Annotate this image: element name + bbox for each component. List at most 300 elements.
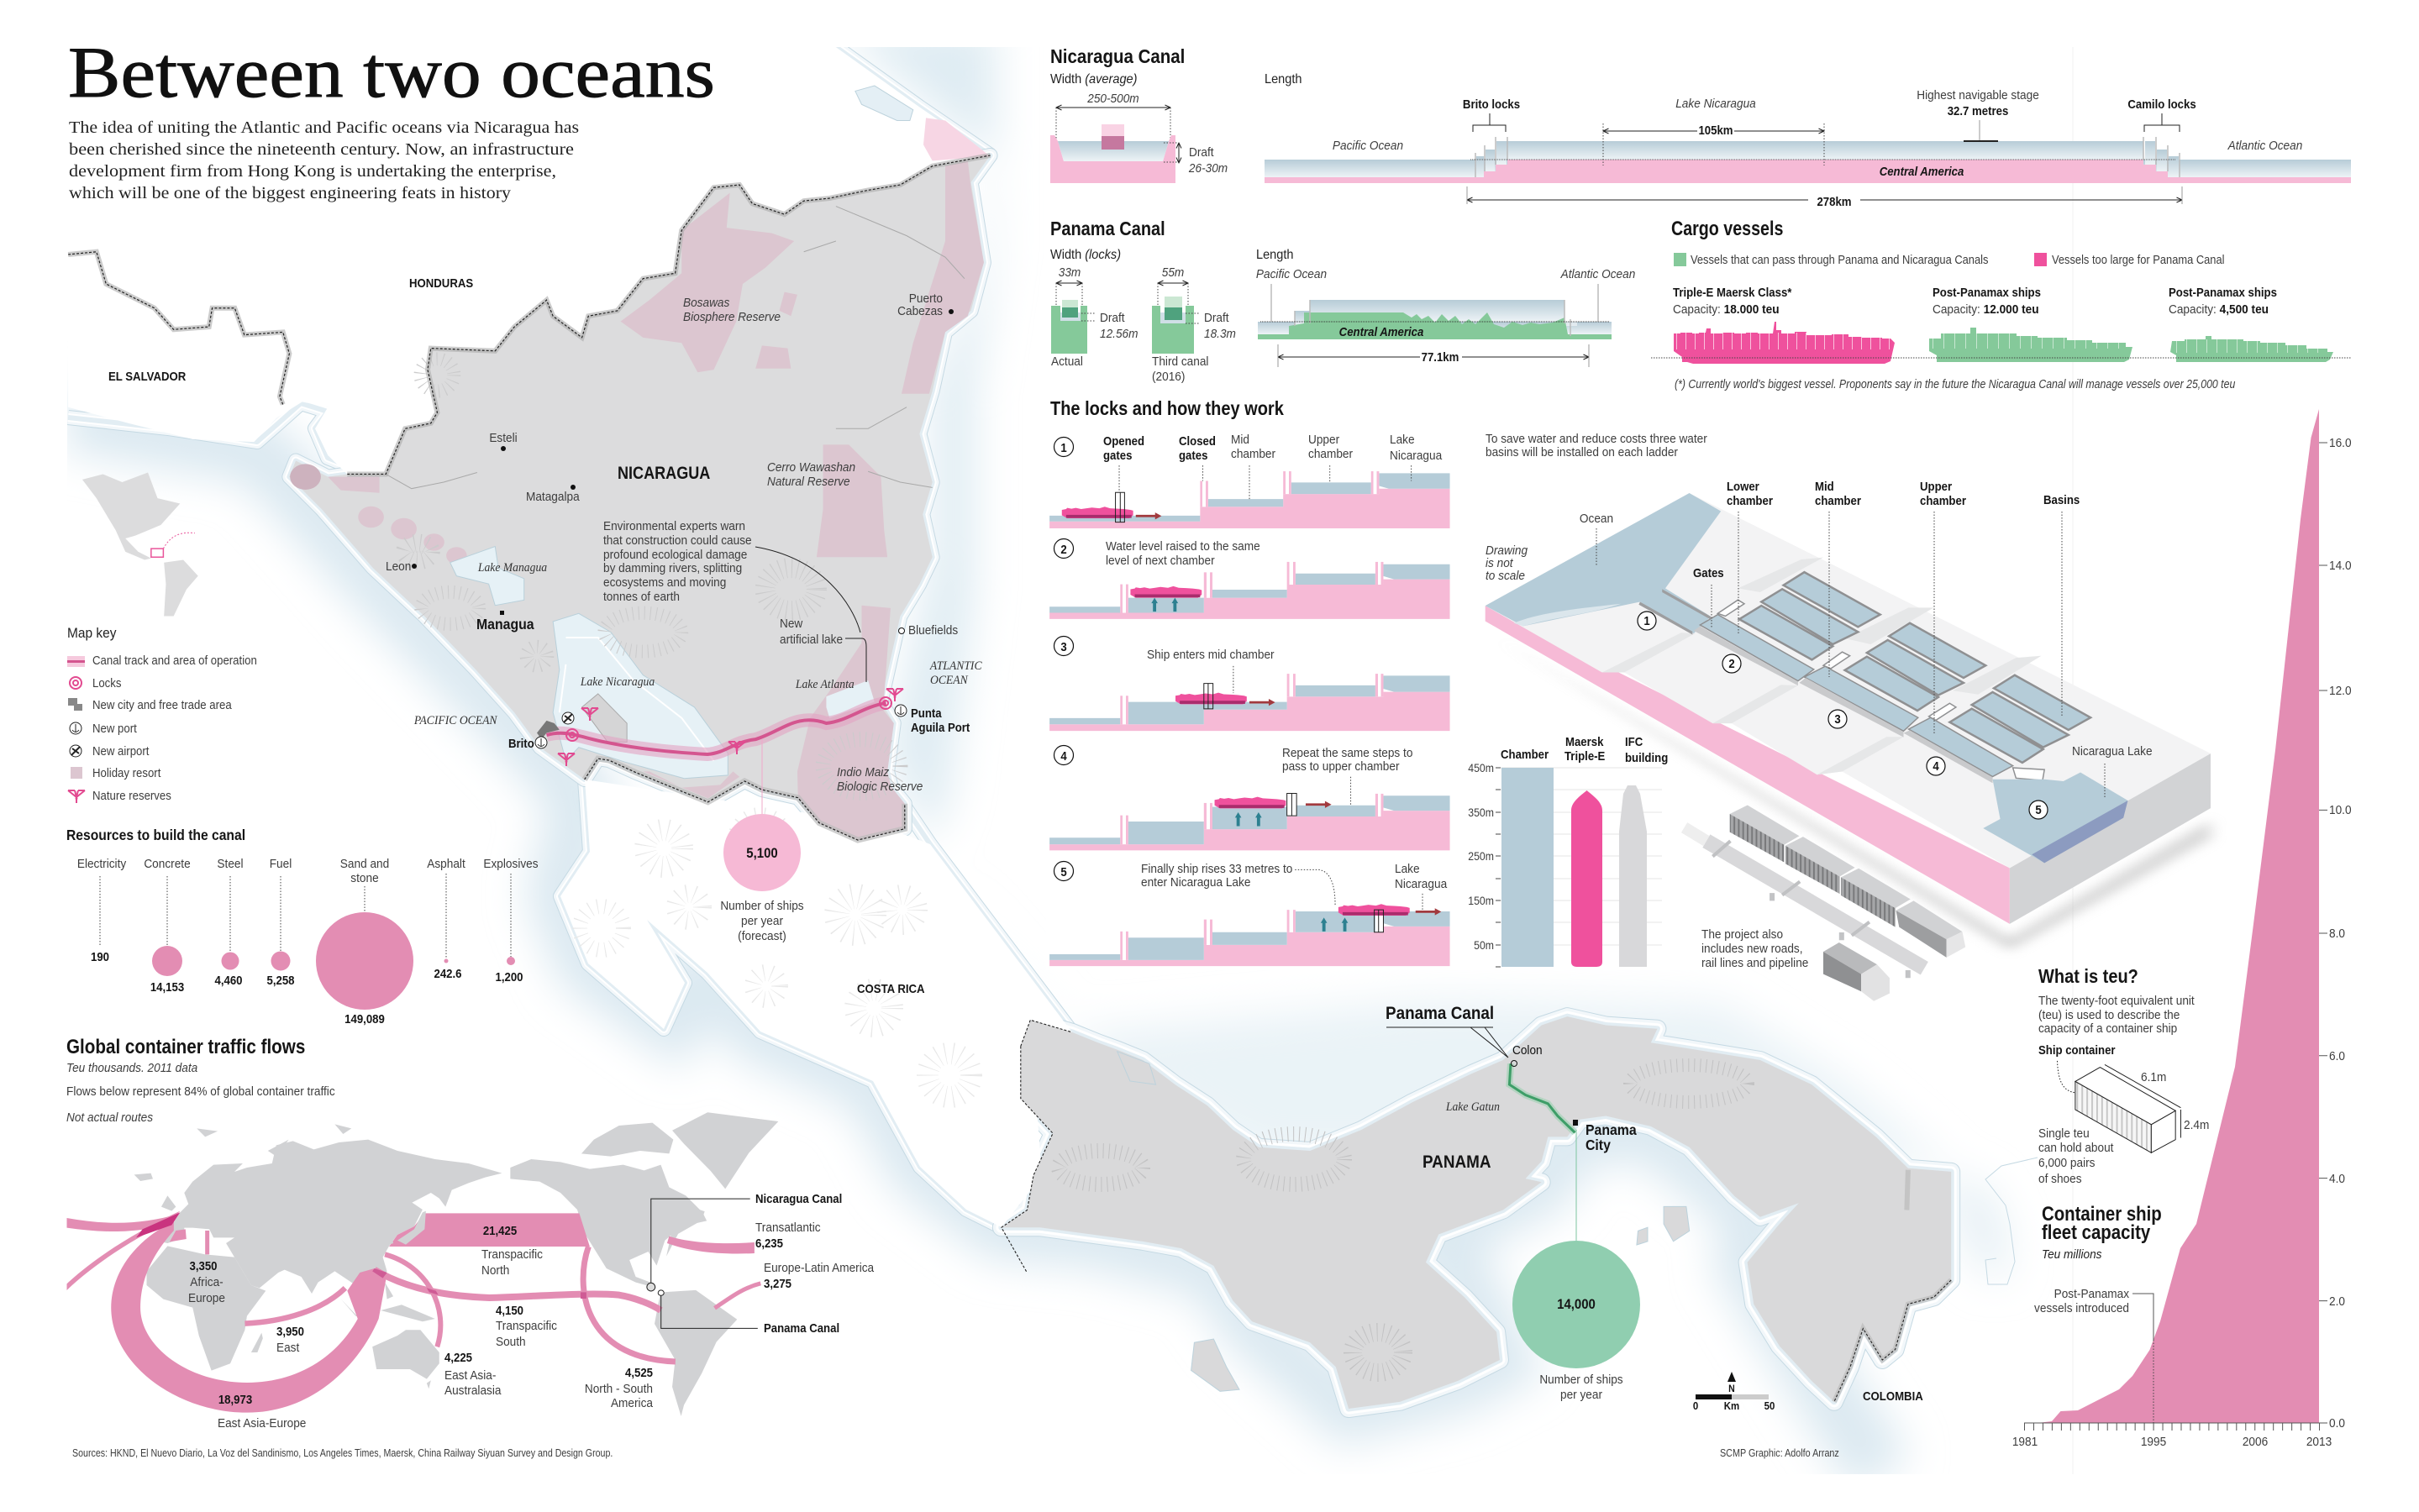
panel: resources to build the canal: Electricity: [77, 857, 127, 871]
map labels: Nicaragua: [108, 276, 982, 995]
panel: locks and how they work: [1049, 397, 1450, 966]
flow: North-South America: [583, 1247, 676, 1362]
isometric canal diagram: [1486, 493, 2211, 1001]
iso diagram labels: Ocean: [1580, 512, 1613, 526]
axis labels: 6.0: [2329, 1049, 2345, 1063]
chart: scale comparison: 150m: [1468, 894, 1494, 907]
length profile: 105km: [1698, 123, 1733, 137]
map key: New port: [92, 721, 137, 735]
callout: environmental warning: Environmental experts warn: [603, 519, 745, 533]
chart: scale comparison: Chamber: [1501, 747, 1549, 761]
lock icons on route: [566, 697, 891, 741]
length profile: Lake Nicaragua: [1675, 97, 1756, 111]
panel: what is teu: of shoes: [2038, 1172, 2082, 1186]
panel: what is teu: Ship container: [2038, 1042, 2116, 1057]
callout: environmental warning: profound ecological damage: [603, 548, 747, 562]
panel: resources to build the canal: Fuel: [270, 857, 292, 871]
panel: cargo vessels: Capacity: 4,500 teu: [2169, 302, 2269, 317]
lock labels: level of next chamber: [1106, 554, 1215, 568]
Nicaragua layers: [68, 118, 991, 840]
locks width: 12.56m: [1100, 327, 1139, 341]
iso diagram labels: The project also: [1701, 927, 1783, 942]
step 4: [1049, 793, 1450, 850]
step 2: [1049, 562, 1450, 619]
Panama map labels: City: [1585, 1137, 1611, 1153]
chart: fleet capacity: fleet capacity: [2042, 1221, 2151, 1243]
locks width: Draft: [1100, 311, 1125, 325]
world map labels: Transpacific: [481, 1247, 543, 1262]
title: Between two oceans: [68, 32, 715, 113]
lock labels: Upper: [1308, 433, 1339, 447]
chart: fleet capacity: [2012, 409, 2352, 1449]
map key: Locks: [92, 675, 122, 690]
map labels: Nicaragua: COSTA RICA: [857, 981, 925, 995]
panel: global container traffic flows heading: Flows below represent 84% of global container traffic: [66, 1084, 335, 1099]
flow: Africa-Europe: [67, 1211, 180, 1290]
map labels: Nicaragua: New: [780, 617, 803, 631]
chart: scale comparison: Triple-E: [1564, 748, 1605, 763]
panel: resources to build the canal: 149,089: [344, 1011, 385, 1026]
locks width: 18.3m: [1204, 327, 1236, 341]
world map labels: 4,150: [496, 1303, 523, 1317]
Panama map labels: Colon: [1512, 1043, 1543, 1058]
panel: global container traffic flows heading: Global container traffic flows: [66, 1036, 305, 1058]
panel: Nicaragua Canal: Length: [1265, 71, 1302, 87]
locks width: Draft: [1204, 311, 1229, 325]
Lake Nicaragua: [553, 613, 728, 779]
panel: Panama Canal: Width (locks): [1050, 247, 1121, 262]
iso diagram labels: chamber: [1815, 493, 1861, 507]
map labels: Nicaragua: Cerro Wawashan: [767, 460, 855, 475]
panel: resources to build the canal: 5,258: [267, 973, 295, 987]
map key: [67, 625, 257, 803]
world map labels: Panama Canal: [764, 1320, 839, 1335]
ocean: [1486, 493, 1721, 633]
lock labels: Mid: [1231, 433, 1249, 447]
panel: what is teu: 6,000 pairs: [2038, 1156, 2095, 1170]
map key: New airport: [92, 743, 150, 758]
panel: what is teu: (teu) is used to describe the: [2038, 1008, 2180, 1022]
chart: scale comparison: 350m: [1468, 806, 1494, 819]
length profile: Central America: [1339, 324, 1423, 339]
Panama canal route: [1509, 1063, 1575, 1132]
panel: locks and how they work: 4: [1060, 748, 1067, 763]
panel: cargo vessels: Cargo vessels: [1671, 217, 1783, 239]
panel: Panama Canal: Length: [1256, 247, 1293, 262]
map labels: Nicaragua: PACIFIC OCEAN: [413, 713, 498, 727]
lock labels: chamber: [1308, 447, 1353, 461]
world map labels: Europe-Latin America: [764, 1261, 874, 1275]
map labels: Nicaragua: Lake Nicaragua: [580, 675, 655, 689]
intro text: [69, 118, 579, 202]
canal area band: [547, 703, 886, 754]
map labels: Nicaragua: Brito: [508, 736, 534, 750]
chart: scale comparison: 450m: [1468, 761, 1494, 774]
world map labels: East: [276, 1341, 299, 1355]
Panama map labels: SCMP Graphic: Adolfo Arranz: [1720, 1446, 1839, 1459]
length profile: Brito locks: [1463, 97, 1520, 111]
chamber side walls: [1694, 626, 1993, 783]
panel: cargo vessels: Post-Panamax ships: [2169, 285, 2277, 299]
locks width: 55m: [1162, 265, 1184, 280]
chart: scale comparison: IFC: [1625, 734, 1643, 748]
flow overlap: [136, 1212, 180, 1237]
Japan and Korea: [381, 1211, 426, 1246]
map labels: Nicaragua: Lake Managua: [477, 560, 547, 575]
locks width: [1051, 265, 1236, 384]
panel: what is teu: The twenty-foot equivalent unit: [2038, 994, 2195, 1008]
map labels: Nicaragua: Managua: [476, 616, 534, 633]
panel: cargo vessels: Triple-E Maersk Class*: [1673, 285, 1792, 299]
iso diagram labels: to scale: [1486, 569, 1525, 583]
axis labels: 2013: [2306, 1435, 2332, 1449]
map labels: Nicaragua: ATLANTIC: [929, 659, 982, 673]
iso diagram labels: is not: [1486, 556, 1514, 570]
nature reserve icons: [558, 689, 903, 766]
world map labels: Nicaragua Canal: [755, 1191, 842, 1205]
length profile: [1265, 88, 2351, 208]
map labels: Nicaragua: Matagalpa: [526, 490, 580, 504]
intro text: been cherished since the nineteenth century. Now, an infrastructure: [69, 140, 574, 159]
axis labels: 2.0: [2329, 1294, 2345, 1309]
panel: what is teu: [2038, 965, 2209, 1186]
continents east: [655, 1112, 778, 1416]
chart: scale comparison: 250m: [1468, 849, 1494, 863]
length profile: 278km: [1817, 194, 1852, 208]
border dashed: [68, 155, 991, 840]
iso diagram labels: chamber: [1920, 493, 1966, 507]
width cross-section: 26-30m: [1188, 161, 1228, 176]
panel: locks and how they work: 5: [1060, 864, 1067, 879]
panel: resources to build the canal: Steel: [217, 857, 244, 871]
terrace bands: [1602, 558, 2041, 774]
iso diagram labels: 1: [1643, 613, 1650, 627]
reserve: India Maiz: [797, 606, 905, 840]
width cross-section: 250-500m: [1086, 92, 1139, 106]
Panama map labels: PANAMA: [1422, 1152, 1491, 1172]
iso diagram labels: rail lines and pipeline: [1701, 956, 1808, 970]
world map labels: Transatlantic: [755, 1221, 821, 1235]
gulf of Uraba: [1985, 1158, 2038, 1284]
Lake Atlanta: [826, 680, 875, 718]
panel: cargo vessels: Post-Panamax ships: [1933, 285, 2041, 299]
panel: cargo vessels: (*) Currently world's biggest vessel. Proponents say in the future the Nicaragua Canal will manage vessels over 25,000 teu: [1675, 377, 2236, 391]
map labels: Nicaragua: HONDURAS: [409, 276, 473, 290]
reserve tip Honduras: [923, 118, 991, 160]
iso diagram labels: includes new roads,: [1701, 942, 1803, 956]
intro text: which will be one of the biggest engineering feats in history: [69, 184, 511, 202]
iso diagram labels: Lower: [1727, 479, 1759, 493]
sea tint: [68, 25, 2008, 1474]
rivers: [386, 207, 965, 489]
step numbers: [1054, 437, 1074, 880]
world map labels: 6,235: [755, 1236, 783, 1250]
locks width: Actual: [1051, 354, 1083, 369]
airport icon: [562, 712, 574, 724]
world map labels: 3,350: [190, 1258, 218, 1273]
Panama map labels: Panama: [1585, 1121, 1637, 1138]
chart: fleet capacity: Teu millions: [2042, 1247, 2102, 1262]
map key: Map key: [67, 625, 117, 641]
scale bar: N: [1728, 1383, 1735, 1394]
reserve: Cerro Wawashan: [817, 444, 887, 557]
length profile: Atlantic Ocean: [1560, 267, 1635, 281]
map labels: Nicaragua: Biosphere Reserve: [683, 310, 781, 324]
map labels: Nicaragua: Bosawas: [683, 296, 729, 310]
chambers: [1700, 615, 2013, 777]
lock labels: Repeat the same steps to: [1282, 746, 1412, 760]
axis labels: 16.0: [2329, 436, 2352, 450]
Lake Managua: [450, 547, 524, 606]
axis labels: 1981: [2012, 1435, 2038, 1449]
iso labels: basins will be installed on each ladder: [1486, 445, 1678, 459]
length profile: Central America: [1880, 164, 1964, 178]
panel: Nicaragua Canal: Width (average): [1050, 71, 1137, 87]
map labels: Nicaragua: Aguila Port: [911, 720, 970, 734]
map key: Holiday resort: [92, 765, 161, 780]
lock labels: Water level raised to the same: [1106, 539, 1260, 554]
length profile: Atlantic Ocean: [2227, 139, 2302, 153]
lock labels: Nicaragua: [1395, 877, 1447, 891]
chart: fleet capacity: Post-Panamax: [2054, 1287, 2130, 1301]
hachure relief: [405, 359, 900, 793]
hachures: Costa Rica relief: [580, 818, 971, 1097]
callout: Nicaragua ships per year: Number of ships: [720, 899, 804, 913]
world map labels: North - South: [585, 1382, 653, 1396]
iso diagram labels: 4: [1933, 759, 1939, 773]
callout: environmental warning: by damming rivers, splitting: [603, 561, 742, 575]
panel: what is teu: What is teu?: [2038, 965, 2138, 987]
locks width: (2016): [1152, 370, 1185, 384]
reserve: west patches: [328, 477, 739, 798]
new city area: [537, 721, 560, 739]
callout: environmental warning: tonnes of earth: [603, 590, 680, 604]
world map labels: 3,950: [276, 1324, 304, 1338]
north america: [82, 473, 180, 560]
canal pointers: [647, 1199, 758, 1328]
iso labels: To save water and reduce costs three water: [1486, 432, 1707, 446]
panel: Panama Canal: Panama Canal: [1050, 218, 1165, 239]
reserve: Bosawas: [621, 193, 794, 372]
length profile: Pacific Ocean: [1256, 267, 1327, 281]
map labels: Nicaragua: Cabezas: [897, 304, 943, 318]
panel: cargo vessels: [1651, 217, 2351, 391]
flow: transpacific south: [375, 1270, 660, 1310]
top face: [1486, 493, 2211, 868]
map labels: Nicaragua: artificial lake: [780, 633, 843, 647]
truck: [1823, 942, 1877, 974]
lock labels: pass to upper chamber: [1282, 759, 1400, 774]
world map labels: East Asia-: [444, 1368, 497, 1383]
map labels: Nicaragua: Indio Maiz: [837, 765, 889, 780]
panel: cargo vessels: Capacity: 12.000 teu: [1933, 302, 2039, 317]
port icons: [535, 705, 907, 748]
world map with flows: [67, 1112, 778, 1416]
map key: New city and free trade area: [92, 697, 232, 711]
iso diagram labels: Gates: [1693, 565, 1724, 580]
lock diagrams: [1049, 465, 1450, 966]
callout: Panama ships per year: 14,000: [1557, 1297, 1596, 1312]
south america: [164, 560, 198, 616]
axis labels: 0.0: [2329, 1416, 2345, 1431]
axis labels: 8.0: [2329, 927, 2345, 941]
panel: cargo vessels: Capacity: 18.000 teu: [1673, 302, 1780, 317]
map labels: Nicaragua: Lake Atlanta: [795, 677, 855, 691]
iso diagram labels: chamber: [1727, 493, 1773, 507]
Panama map labels: Lake Gatun: [1445, 1100, 1500, 1114]
bar: Maersk Triple-E: [1571, 790, 1602, 967]
callout: Panama ships per year: Number of ships: [1539, 1373, 1623, 1387]
panel: Nicaragua Canal: [1050, 45, 2351, 208]
panel: cargo vessels: Vessels that can pass through Panama and Nicaragua Canals: [1691, 252, 1988, 266]
train tops: [1730, 805, 1962, 939]
reserve patches: [755, 292, 797, 369]
map key: Nature reserves: [92, 788, 171, 802]
lock labels: Opened: [1103, 433, 1144, 448]
lock labels: Closed: [1179, 433, 1216, 448]
map right edge: [2072, 47, 2074, 1474]
panel: resources to build the canal: 4,460: [215, 973, 243, 987]
axis labels: 4.0: [2329, 1172, 2345, 1186]
panel: what is teu: Single teu: [2038, 1126, 2090, 1141]
panel: global container traffic flows heading: Not actual routes: [66, 1110, 153, 1125]
Panama map labels: [1386, 1004, 1923, 1459]
Panama gulf islands: [1117, 1052, 1690, 1391]
panel: resources to build the canal: Concrete: [144, 857, 191, 871]
world map labels: 3,275: [764, 1276, 791, 1290]
world map labels: [188, 1191, 874, 1431]
iso labels: [1486, 432, 1707, 459]
locator box: [151, 549, 163, 557]
border Honduras shadow: [68, 155, 991, 474]
world map labels: 18,973: [218, 1392, 252, 1406]
flow: Europe-Latin America: [715, 1284, 760, 1308]
volcano: [290, 464, 321, 490]
world map labels: North: [481, 1263, 509, 1278]
left face: [1486, 606, 2010, 924]
width cross-section: Draft: [1189, 145, 1214, 160]
lock labels: gates: [1103, 448, 1133, 462]
world map labels: East Asia-Europe: [218, 1416, 306, 1431]
iso diagram labels: 2: [1728, 656, 1735, 670]
ship: Triple-E: [1674, 322, 1895, 364]
lock labels: gates: [1179, 448, 1208, 462]
land: Panama: [1002, 1016, 1951, 1409]
length profile: 32.7 metres: [1948, 103, 2008, 118]
iso diagram labels: 5: [2035, 802, 2042, 816]
length profile: Highest navigable stage: [1917, 88, 2039, 102]
iso diagram labels: Mid: [1815, 479, 1834, 493]
flow: Mediterranean: [170, 1229, 209, 1254]
bar: IFC building: [1619, 785, 1647, 967]
map labels: Nicaragua: OCEAN: [930, 673, 969, 687]
coast contour lines: [68, 47, 1951, 1409]
chart: fleet capacity: vessels introduced: [2034, 1301, 2129, 1315]
iso diagram labels: Basins: [2043, 492, 2080, 507]
Panama border dashed: [1002, 1020, 1951, 1402]
Panama map labels: Panama Canal: [1386, 1004, 1494, 1023]
panel: resources to build the canal: 242.6: [434, 966, 462, 980]
panel: resources to build the canal: stone: [350, 871, 379, 885]
map: central america background: [68, 25, 2038, 1474]
panel: resources to build the canal: Sand and: [340, 857, 389, 871]
flow: East Asia-Europe: [111, 1221, 387, 1413]
flow: Atlantic left: [67, 1214, 178, 1231]
length profile: Camilo locks: [2127, 97, 2196, 111]
length profile: 77.1km: [1422, 349, 1459, 364]
lock labels: Ship enters mid chamber: [1147, 648, 1275, 662]
callout: environmental warning: that construction could cause: [603, 533, 752, 548]
map labels: Nicaragua: Leon: [386, 559, 411, 574]
step 5: [1049, 904, 1450, 966]
flow: transatlantic: [667, 1236, 755, 1253]
panel: resources to build the canal: Asphalt: [427, 857, 465, 871]
scale bar: 50: [1764, 1399, 1775, 1412]
basins group 1: [1739, 572, 1880, 659]
intro text: development firm from Hong Kong is undertaking the enterprise,: [69, 162, 556, 181]
flow: East Asia-Australasia: [385, 1254, 440, 1347]
locks width: 33m: [1059, 265, 1081, 280]
chart: scale comparison: building: [1625, 750, 1668, 764]
chart: fleet capacity: Container ship: [2042, 1202, 2162, 1225]
axis labels: 1995: [2141, 1435, 2166, 1449]
map labels: Nicaragua: Biologic Reserve: [837, 780, 923, 794]
map labels: Nicaragua: Bluefields: [908, 623, 958, 638]
shadow: [1498, 638, 2211, 951]
world map labels: Australasia: [444, 1383, 501, 1398]
container drawing: [2057, 1061, 2180, 1152]
lock labels: enter Nicaragua Lake: [1141, 875, 1250, 890]
chart: scale comparison: 50m: [1474, 938, 1494, 952]
panel: Nicaragua Canal: Nicaragua Canal: [1050, 45, 1185, 67]
axis labels: 10.0: [2329, 803, 2352, 817]
axis labels: [2012, 436, 2352, 1449]
panel: global container traffic flows heading: [66, 1036, 335, 1125]
basins group 2: [1845, 623, 1985, 711]
Panama relief: [1059, 1065, 1748, 1373]
map key: Canal track and area of operation: [92, 653, 257, 667]
length profile: [1256, 267, 1635, 367]
panel: Panama Canal: [1050, 218, 1635, 384]
world map labels: Europe: [188, 1291, 225, 1305]
panel: locks and how they work: 1: [1060, 440, 1067, 454]
iso diagram labels: Upper: [1920, 479, 1953, 493]
Ometepe island: [582, 694, 627, 742]
panel: what is teu: can hold about: [2038, 1141, 2113, 1155]
leader lines: [1119, 465, 1422, 911]
Panama map labels: COLOMBIA: [1863, 1389, 1923, 1403]
chart: scale comparison: Maersk: [1565, 734, 1604, 748]
iso diagram labels: Nicaragua Lake: [2072, 744, 2153, 759]
bar: chamber: [1501, 768, 1554, 967]
scale bar: [1693, 1372, 1775, 1412]
lock labels: Lake: [1390, 433, 1415, 447]
panel: what is teu: 6.1m: [2141, 1070, 2166, 1084]
flow: transpacific north: [389, 1213, 590, 1247]
ship: Post-Panamax 4500: [2170, 336, 2333, 362]
callout: environmental warning: [603, 519, 752, 604]
panel: what is teu: capacity of a container ship: [2038, 1021, 2177, 1036]
lock labels: Lake: [1395, 862, 1420, 876]
iso diagram labels: [1486, 479, 2153, 970]
axis labels: 14.0: [2329, 559, 2352, 573]
map labels: Nicaragua: Punta: [911, 706, 942, 720]
white land: Costa Rica: [560, 780, 1072, 1227]
world map labels: 4,525: [625, 1365, 653, 1379]
panel: resources to build the canal: Resources to build the canal: [66, 827, 245, 843]
right face: [2010, 753, 2211, 924]
lock walls: [1638, 589, 1711, 635]
